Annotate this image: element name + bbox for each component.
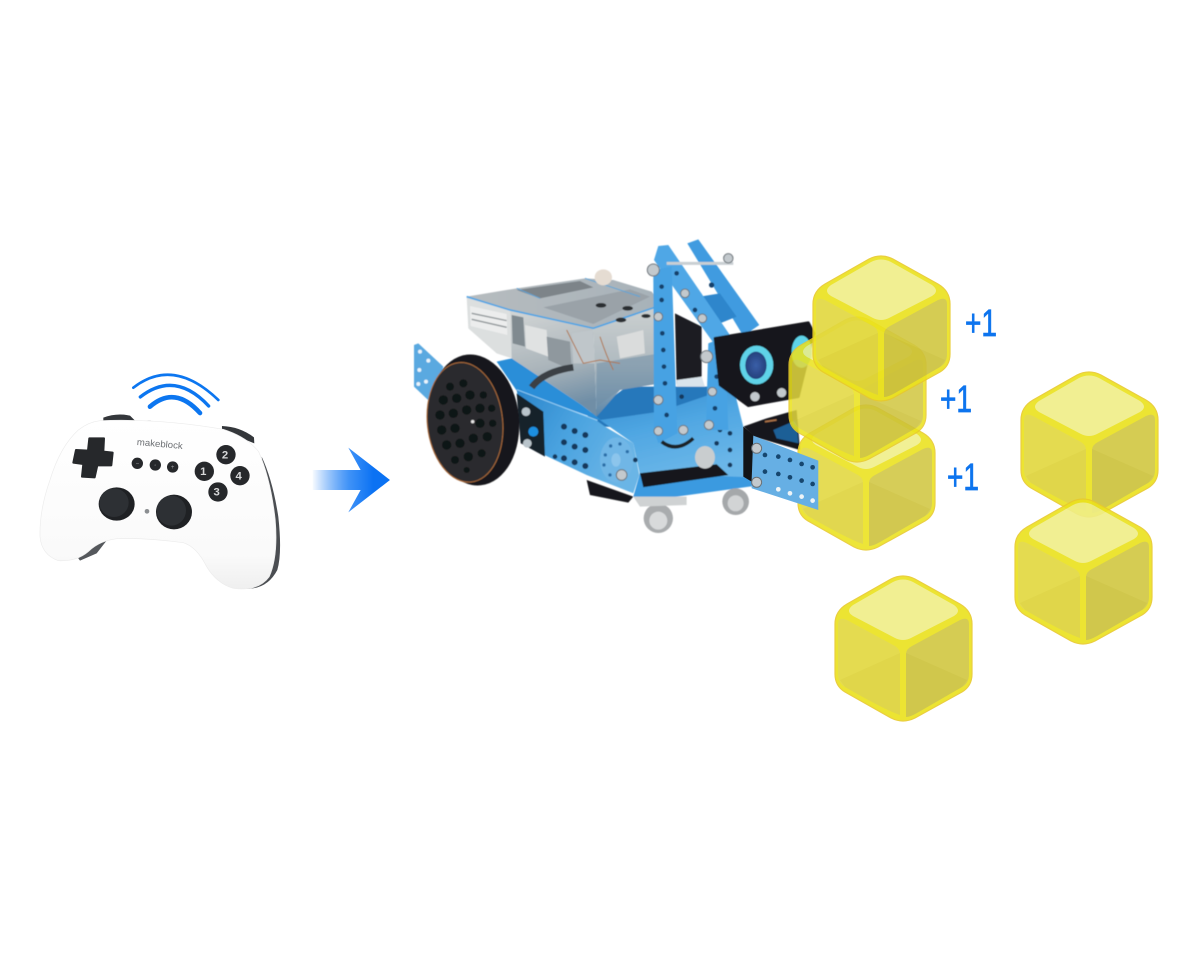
rear shadow edge: [240, 457, 280, 589]
ultrasonic sensor: [715, 323, 814, 406]
gamepad controller: 1: [200, 466, 206, 478]
rear deck behind box: [587, 387, 743, 430]
gamepad controller: 4: [235, 470, 242, 482]
cube: bottom: [835, 576, 972, 721]
front module: [743, 410, 800, 450]
action buttons: [195, 445, 250, 502]
cube: right lower: [1015, 499, 1152, 644]
menu buttons: [132, 458, 178, 473]
controller body: [40, 420, 276, 589]
score label top: +1: [965, 303, 997, 345]
sensor arm frame: [616, 239, 759, 480]
cube: collected middle: [789, 317, 926, 462]
brand name: makeblock: [136, 437, 184, 451]
mBot robot: [414, 239, 814, 533]
cube: collected top: [813, 256, 950, 401]
wifi signal icon: [133, 375, 218, 413]
gamepad controller: [40, 415, 280, 589]
transparent controller box: [467, 269, 662, 417]
cube: collected bottom: [798, 405, 935, 550]
gamepad controller: ◦: [154, 463, 156, 469]
score label middle: +1: [940, 379, 972, 421]
chassis: [497, 358, 754, 533]
d-pad: [73, 438, 113, 477]
blue arrow: [313, 448, 390, 512]
gamepad controller: −: [136, 461, 140, 467]
gamepad controller: +: [171, 465, 175, 471]
score label bottom: +1: [947, 457, 979, 499]
robot front plate: [743, 427, 818, 510]
rear plate: [414, 343, 443, 403]
gamepad controller: 3: [213, 487, 220, 499]
shoulder buttons: [103, 415, 254, 443]
joysticks: [99, 487, 192, 529]
wheel: [421, 350, 526, 490]
cube: right upper: [1021, 372, 1158, 517]
gamepad controller: 2: [222, 449, 228, 461]
